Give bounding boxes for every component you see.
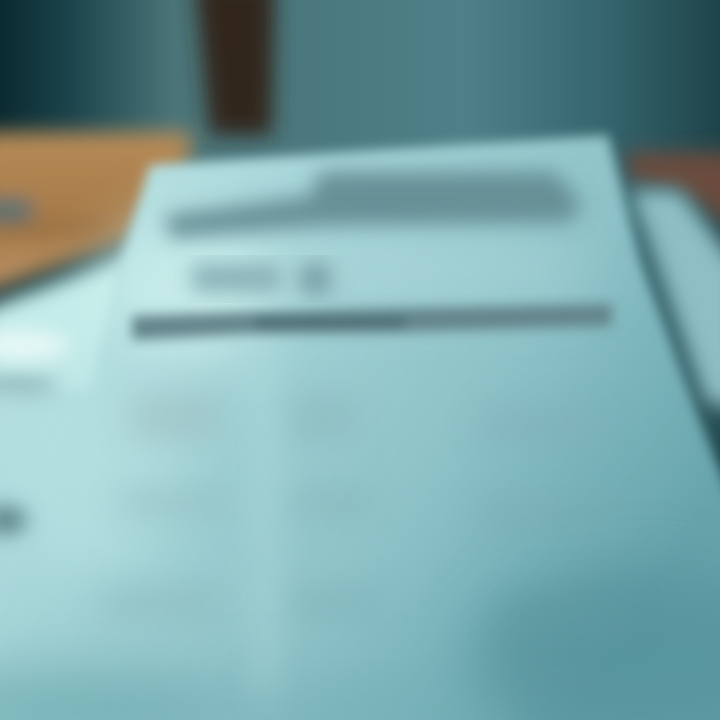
paper shading bbox=[0, 220, 720, 720]
desk surface left bbox=[0, 132, 190, 295]
dark wooden post bbox=[195, 0, 275, 135]
desk surface right bbox=[625, 152, 720, 235]
short sub-heading bbox=[192, 264, 330, 294]
lower-left sheet of paper bbox=[0, 255, 130, 720]
left-edge highlights and smudges bbox=[0, 331, 70, 534]
second sheet of paper right bbox=[630, 190, 720, 440]
faint table columns bbox=[100, 360, 630, 700]
long dark line of text bbox=[132, 304, 612, 340]
heading line bbox=[165, 172, 582, 238]
